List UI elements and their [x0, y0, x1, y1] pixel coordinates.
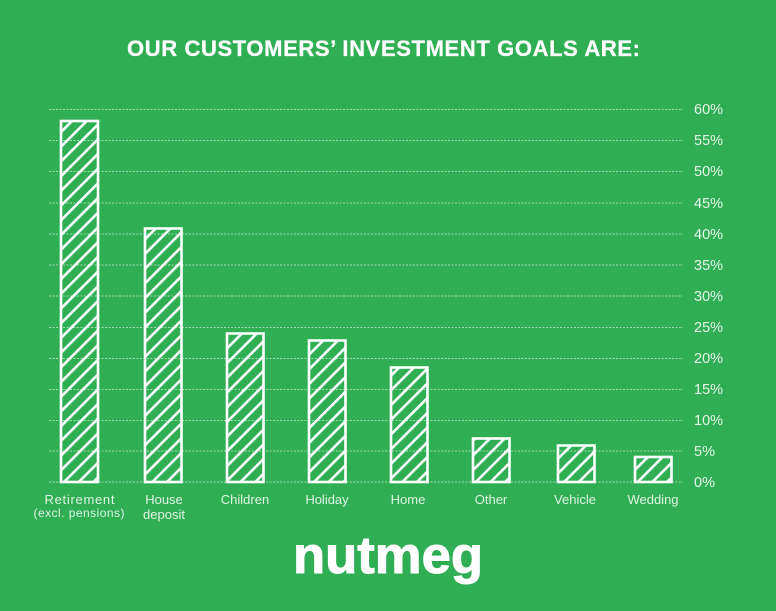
category labels: Vehicle — [554, 492, 596, 507]
title: OUR CUSTOMERS’ INVESTMENT GOALS ARE: — [127, 36, 640, 61]
category labels: Retirement — [44, 492, 115, 507]
bar: Other 7% — [473, 438, 510, 482]
category labels: Wedding — [627, 492, 679, 507]
category labels — [34, 492, 679, 522]
y axis labels: 45% — [694, 196, 723, 212]
y axis labels: 15% — [694, 382, 723, 398]
y axis labels: 5% — [694, 444, 715, 460]
y axis labels: 30% — [694, 289, 723, 305]
bar: Children 24% — [227, 334, 264, 482]
y axis labels: 35% — [694, 258, 723, 274]
y axis labels: 40% — [694, 227, 723, 243]
category labels: Children — [221, 492, 269, 507]
bar: Holiday 23% — [309, 340, 346, 482]
category labels: Holiday — [305, 492, 349, 507]
y axis labels: 60% — [694, 102, 723, 118]
bar: Wedding 4% — [635, 457, 672, 482]
y axis labels: 25% — [694, 320, 723, 336]
y axis labels: 50% — [694, 164, 723, 180]
category labels: Home — [391, 492, 425, 507]
y axis labels — [694, 102, 723, 491]
category labels: (excl. pensions) — [34, 506, 124, 520]
y axis labels: 20% — [694, 351, 723, 367]
bar: Retirement 58% — [61, 121, 98, 482]
y axis labels: 10% — [694, 413, 723, 429]
bar: House deposit 41% — [145, 228, 182, 482]
category labels: Other — [475, 492, 508, 507]
bar: Home 18.5% — [391, 368, 428, 482]
category labels: House — [145, 492, 183, 507]
bar chart — [61, 121, 672, 482]
y axis labels: 0% — [694, 475, 715, 491]
category labels: deposit — [143, 507, 185, 522]
y axis labels: 55% — [694, 133, 723, 149]
bar: Vehicle 6% — [558, 446, 594, 482]
logo: nutmeg: nutmeg — [293, 527, 483, 585]
